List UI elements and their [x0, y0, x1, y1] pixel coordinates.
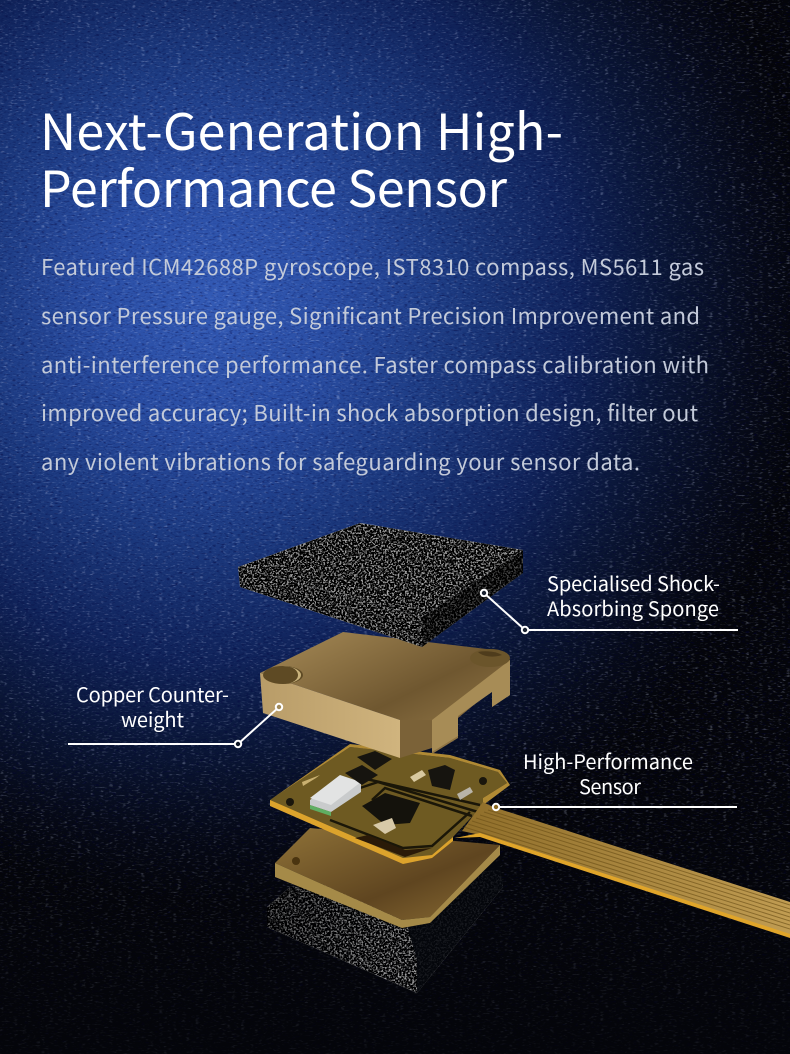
callout: sponge — [481, 568, 738, 633]
callout: sponge: Absorbing Sponge — [547, 593, 719, 622]
callout: copper counterweight — [68, 679, 282, 747]
icon: small components — [302, 770, 473, 834]
body text: any violent vibrations for safeguarding your sensor data. — [41, 445, 640, 477]
circuit board — [270, 744, 510, 864]
callout: sensor: High-Performance — [523, 746, 693, 775]
icon: silver shield can — [310, 775, 361, 816]
upper foam sponge — [238, 523, 523, 647]
callout: sensor: Sensor — [579, 771, 641, 800]
lower foam pad — [267, 860, 503, 993]
title: Next-Generation High- — [40, 93, 563, 165]
title: Performance Sensor — [40, 150, 508, 222]
upper copper counterweight — [260, 632, 510, 758]
icon: chips — [345, 751, 455, 790]
callout: copper counterweight: weight — [121, 704, 184, 733]
body text — [41, 250, 709, 477]
callout: copper counterweight: Copper Counter- — [76, 679, 229, 708]
body text: Featured ICM42688P gyroscope, IST8310 compass, MS5611 gas — [41, 250, 704, 282]
callout: sensor — [493, 746, 737, 810]
lower copper plate — [275, 828, 500, 928]
title — [40, 93, 563, 222]
flex cable — [455, 802, 790, 938]
body text: anti-interference performance. Faster compass calibration with — [41, 348, 709, 380]
icon: screw hole left — [263, 666, 303, 684]
callout: sponge: Specialised Shock- — [547, 568, 720, 597]
icon: screw hole right — [470, 649, 510, 667]
body text: sensor Pressure gauge, Significant Precision Improvement and — [41, 299, 700, 331]
body text: improved accuracy; Built-in shock absorption design, filter out — [41, 396, 698, 428]
